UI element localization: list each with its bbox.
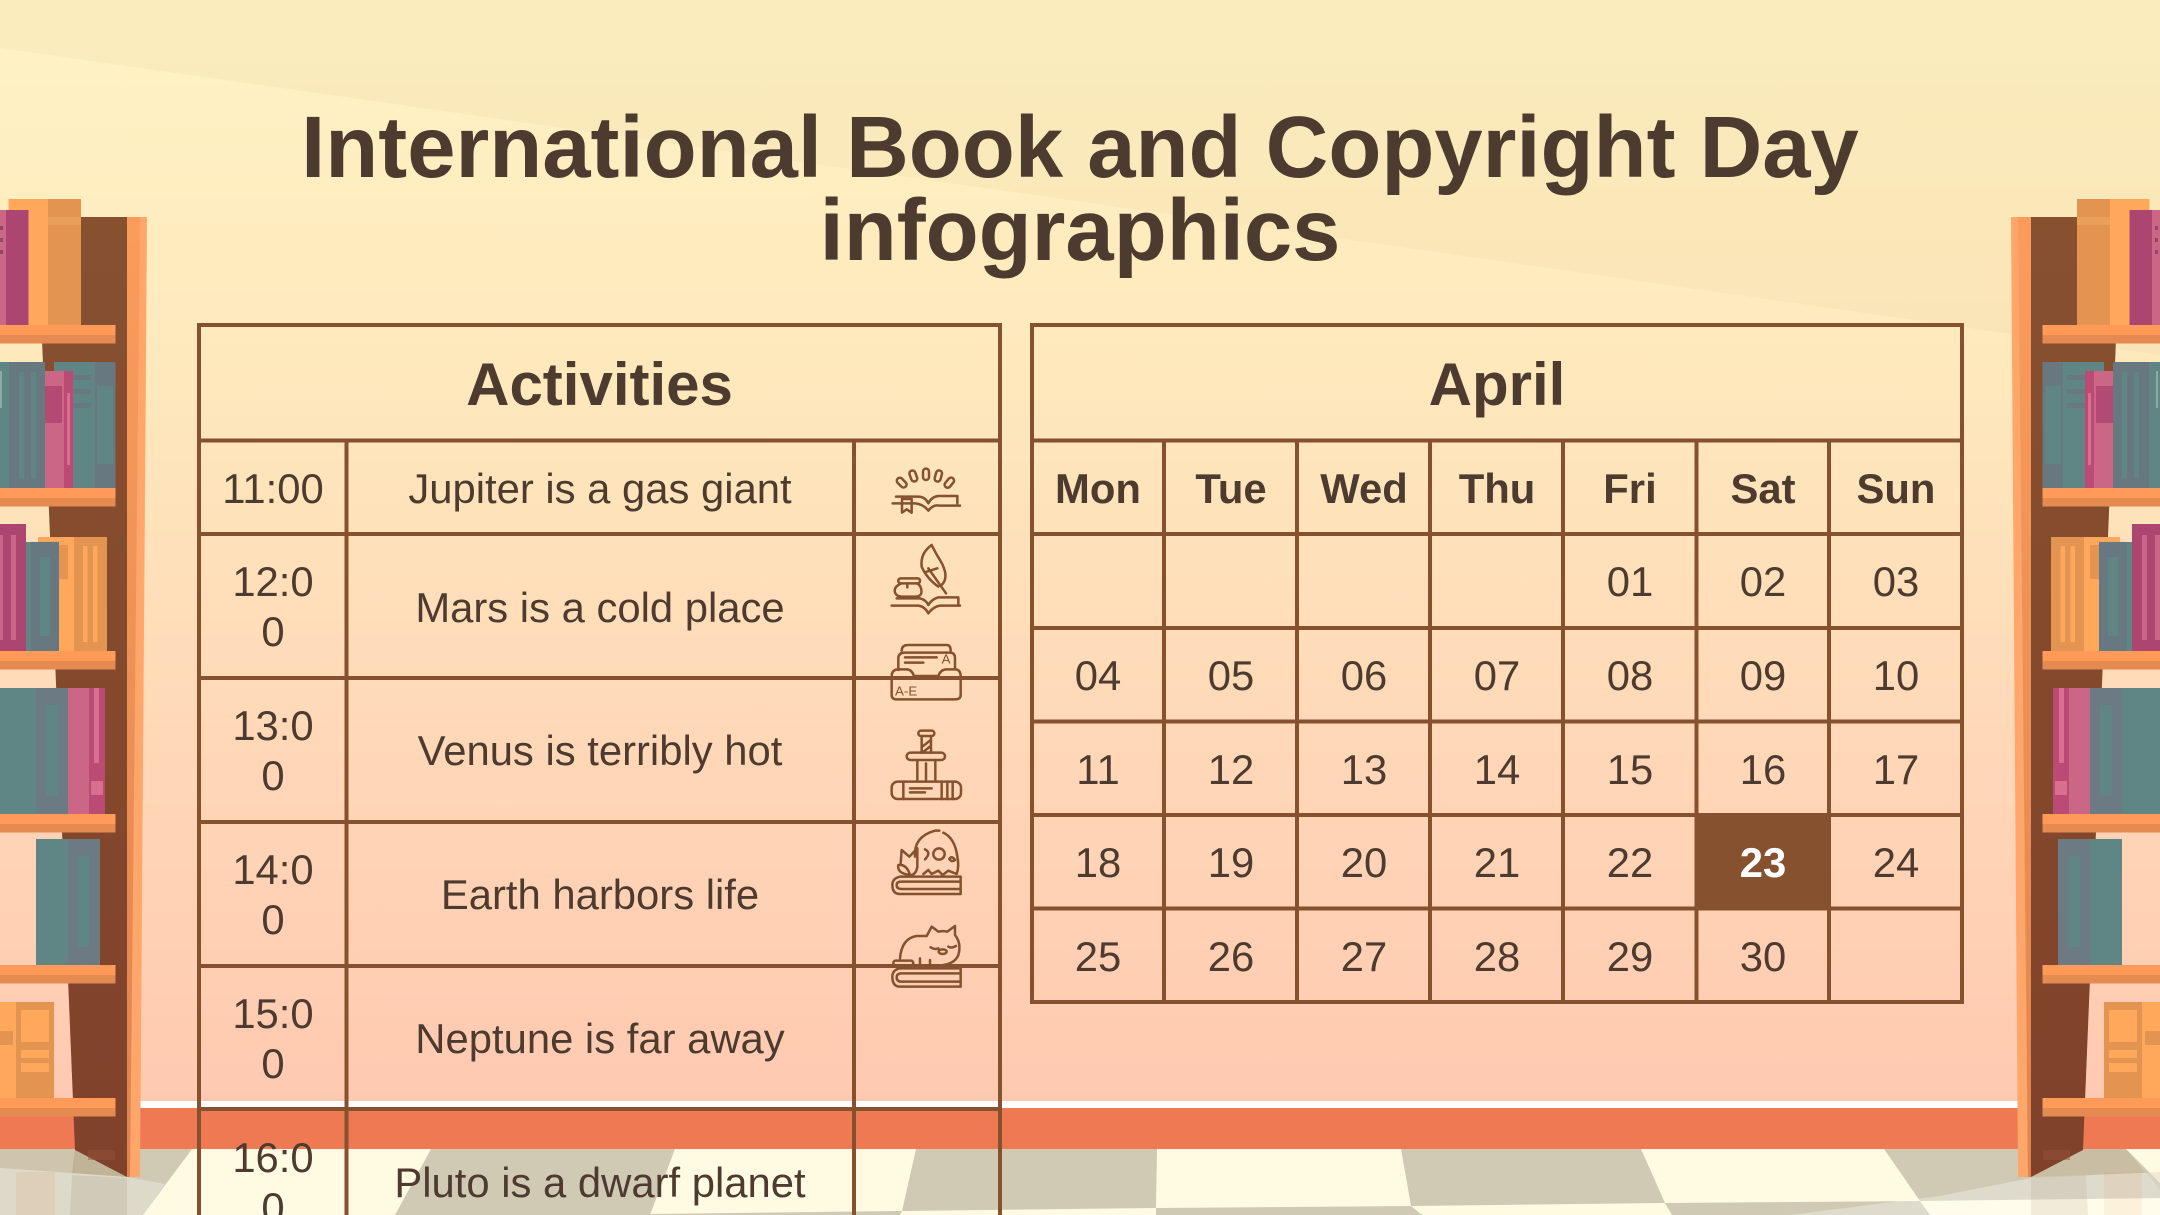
bookshelf: left (0, 199, 147, 1177)
activity descriptions: Pluto is a dwarf planet (394, 1159, 806, 1206)
weekday headers: Wed (1320, 465, 1408, 512)
dates: 25 (1075, 933, 1121, 980)
dates: 15 (1607, 746, 1653, 793)
activity times: 0 (261, 608, 285, 655)
activity times: 14:0 (232, 846, 314, 893)
background: skirting board (0, 1101, 2160, 1149)
books: shelf 5 (36, 839, 100, 965)
dates: 22 (1607, 839, 1653, 886)
activity descriptions: Neptune is far away (415, 1015, 785, 1062)
dates: 30 (1740, 933, 1786, 980)
dates (1075, 558, 1919, 980)
dates: 04 (1075, 652, 1121, 699)
title (301, 99, 1859, 279)
dates: 16 (1740, 746, 1786, 793)
activity times: 0 (261, 752, 285, 799)
activity times: 11:00 (222, 465, 324, 512)
icon: card file A-E: A (942, 652, 951, 667)
dates: 07 (1474, 652, 1520, 699)
books: shelf 4 (0, 688, 105, 814)
floor reflection and shadow: left (0, 1149, 165, 1215)
activity times: 15:0 (232, 990, 314, 1037)
panel: activities table (199, 325, 1000, 1215)
dates: 29 (1607, 933, 1653, 980)
heading: Activities: Activities (466, 351, 733, 418)
activity times: 0 (261, 896, 285, 943)
icon: card file A-E (892, 645, 961, 699)
activity descriptions: Venus is terribly hot (418, 727, 783, 774)
title: International Book and Copyright Day (301, 99, 1859, 196)
dates: 06 (1341, 652, 1387, 699)
dates: 18 (1075, 839, 1121, 886)
dates: 12 (1208, 746, 1254, 793)
weekday headers: Fri (1603, 465, 1657, 512)
weekday headers: Mon (1055, 465, 1141, 512)
activity descriptions: Jupiter is a gas giant (408, 465, 792, 512)
shelf frame (37, 217, 147, 1177)
heading: April: April (1429, 351, 1565, 418)
weekday headers: Sun (1857, 465, 1935, 512)
activity times: 13:0 (232, 702, 314, 749)
calendar grid (1032, 325, 1962, 1002)
panel: April calendar (1032, 325, 1962, 1002)
books: shelf 1 (0, 199, 81, 325)
activity descriptions: Mars is a cold place (415, 584, 785, 631)
dates: 17 (1873, 746, 1919, 793)
dates: 08 (1607, 652, 1653, 699)
activity times: 16:0 (232, 1134, 314, 1181)
weekday headers: Sat (1730, 465, 1796, 512)
background: checkered floor (0, 1149, 2160, 1215)
activity times (222, 465, 324, 1215)
icon: card file A-E: A-E (895, 684, 917, 699)
dates: 14 (1474, 746, 1520, 793)
activity descriptions: Earth harbors life (441, 871, 759, 918)
title: infographics (820, 182, 1340, 279)
dates: 09 (1740, 652, 1786, 699)
weekday headers: Tue (1195, 465, 1267, 512)
dates: 28 (1474, 933, 1520, 980)
weekday headers: Thu (1459, 465, 1535, 512)
dates: 24 (1873, 839, 1919, 886)
shelf boards (0, 325, 116, 1116)
books: shelf 2 (0, 362, 116, 488)
dates: 27 (1341, 933, 1387, 980)
dates: 05 (1208, 652, 1254, 699)
bookshelf: right (2011, 199, 2160, 1177)
dates: 19 (1208, 839, 1254, 886)
activity descriptions (394, 465, 806, 1206)
dates: 13 (1341, 746, 1387, 793)
icon: quill and ink pot on book (892, 545, 960, 613)
floor reflection and shadow: right (1790, 1149, 2160, 1215)
weekday headers (1055, 465, 1935, 512)
dates: 23 (1740, 839, 1786, 886)
icon: sleeping cat on book (892, 926, 961, 987)
dates: 02 (1740, 558, 1786, 605)
icon: open book with light rays (893, 469, 960, 513)
dates: 11 (1076, 746, 1120, 793)
dates: 21 (1474, 839, 1520, 886)
table grid (199, 325, 1000, 1215)
dates: 26 (1208, 933, 1254, 980)
icon: sword on book (892, 731, 961, 799)
dates: 01 (1607, 558, 1653, 605)
dates: 03 (1873, 558, 1919, 605)
highlighted date cell (1694, 813, 1830, 910)
activity times: 0 (261, 1040, 285, 1087)
dates: 10 (1873, 652, 1919, 699)
dates: 20 (1341, 839, 1387, 886)
activity times: 12:0 (232, 558, 314, 605)
books: shelf 3 (0, 524, 107, 651)
books: shelf 6 (0, 1002, 54, 1098)
icon: skull and plant on book (892, 831, 961, 894)
